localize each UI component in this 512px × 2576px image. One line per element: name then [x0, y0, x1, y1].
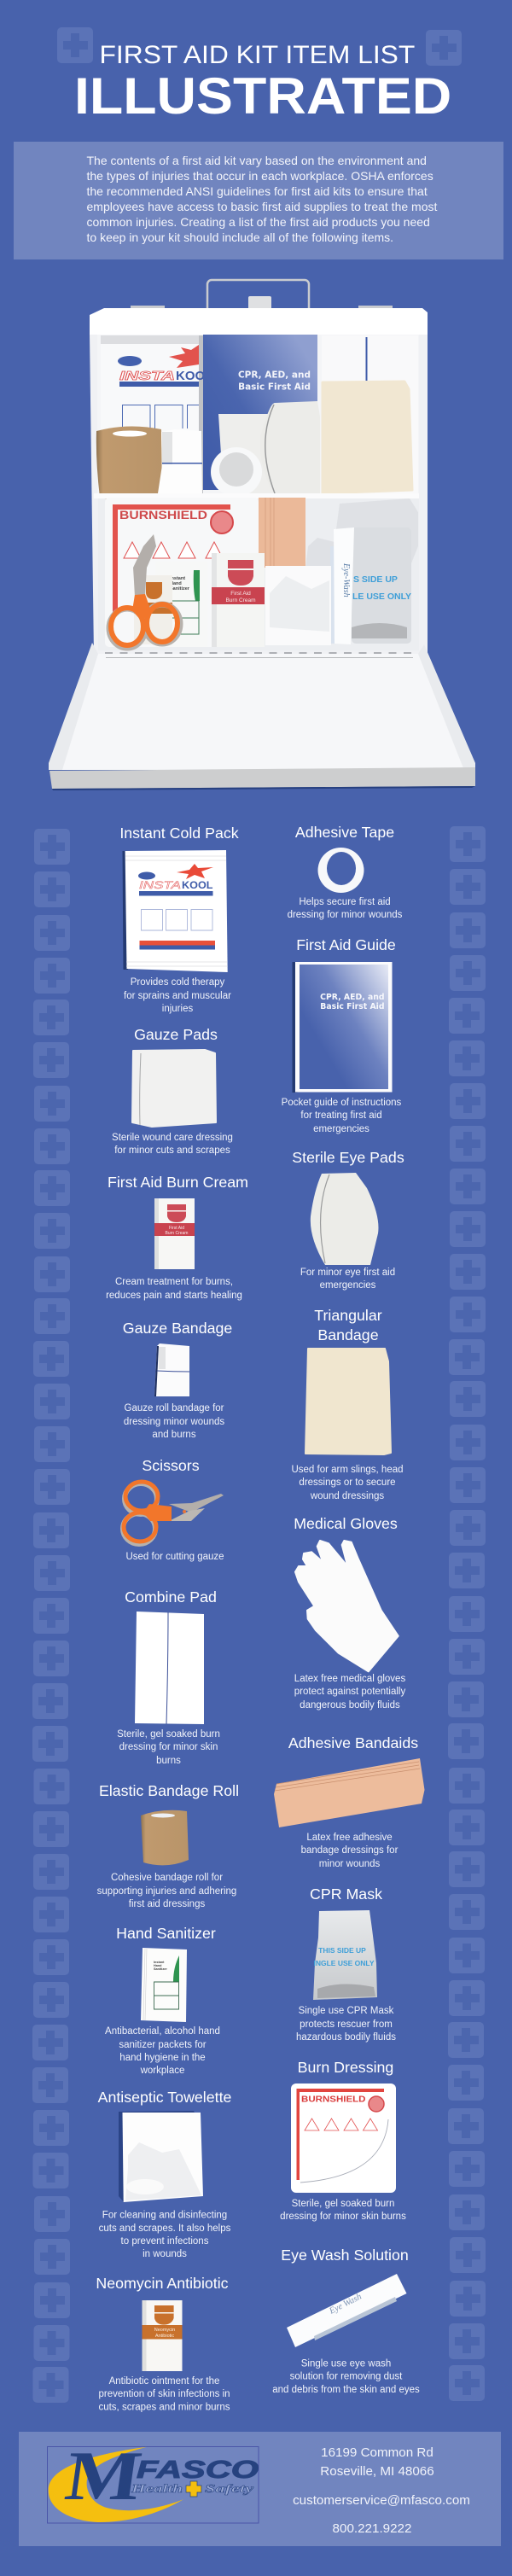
item: triangular bandage	[291, 1307, 404, 1501]
icon: triangular bandage	[305, 1349, 391, 1454]
cold pack in kit: KOO	[176, 369, 205, 383]
icon: burn cream box	[154, 1198, 195, 1269]
cold pack in kit: INSTA	[119, 370, 175, 383]
CPR mask in kit: LE USE ONLY	[352, 592, 411, 602]
panel: footer	[19, 2432, 501, 2546]
icon: guide booklet: Basic First Aid	[320, 1002, 384, 1011]
description: Used for arm slings, head	[291, 1465, 404, 1475]
door front lip	[49, 767, 475, 789]
description: injuries	[162, 1004, 193, 1014]
icon: gauze pads	[132, 1050, 216, 1127]
icon: cold pack	[123, 850, 228, 972]
logo: MFASCO Health + Safety: FASCO	[137, 2457, 259, 2484]
icon: burn dressing: BURNSHIELD	[301, 2095, 365, 2105]
item: scissors	[123, 1457, 224, 1562]
description: minor wounds	[319, 1859, 381, 1869]
item: medical gloves	[294, 1515, 405, 1711]
title: FIRST AID KIT ITEM LIST	[99, 41, 415, 69]
description: workplace	[140, 2066, 184, 2076]
description: Latex free medical gloves	[294, 1674, 405, 1684]
shelf	[94, 493, 419, 498]
antiseptic towelette in kit	[265, 566, 331, 645]
intro text: the types of injuries that occur in each workplace. OSHA enforces	[87, 169, 433, 183]
heading: Instant Cold Pack	[119, 825, 239, 842]
kit interior	[90, 335, 428, 656]
gauze bandage in kit	[158, 429, 202, 493]
item: burn dressing	[280, 2059, 406, 2222]
hand sanitizer in kit: Hand	[170, 581, 182, 586]
description: Single use CPR Mask	[299, 2006, 394, 2016]
item: adhesive bandaids	[274, 1734, 425, 1869]
eye wash in kit	[330, 527, 354, 644]
burn dressing in kit: BURNSHIELD	[119, 509, 207, 522]
description: hazardous bodily fluids	[296, 2032, 396, 2043]
heading: Adhesive Tape	[295, 824, 394, 841]
heading: Gauze Pads	[134, 1026, 218, 1043]
icon: eye wash: Eye Wash	[327, 2292, 364, 2317]
description: dangerous bodily fluids	[300, 1700, 400, 1711]
burn dressing in kit	[105, 498, 259, 647]
icon: CPR mask bag	[313, 1910, 377, 2000]
title	[74, 41, 451, 125]
heading: Combine Pad	[125, 1588, 217, 1606]
item: sterile eye pads	[292, 1149, 404, 1291]
icon: scissors	[123, 1482, 224, 1544]
description: for sprains and muscular	[124, 991, 231, 1001]
heading: Neomycin Antibiotic	[96, 2275, 229, 2292]
icon: elastic bandage roll	[141, 1810, 189, 1865]
description: Provides cold therapy	[131, 977, 225, 988]
icon: burn dressing	[291, 2084, 396, 2193]
kit handle	[131, 280, 393, 312]
icon: eye wash	[287, 2274, 406, 2347]
heading: Gauze Bandage	[123, 1320, 232, 1337]
CPR mask in kit: S SIDE UP	[353, 574, 398, 585]
description: bandage dressings for	[301, 1845, 399, 1856]
description: and debris from the skin and eyes	[272, 2385, 420, 2395]
description: prevention of skin infections in	[98, 2389, 230, 2399]
hand sanitizer in kit	[155, 562, 207, 647]
heading: Hand Sanitizer	[116, 1925, 216, 1942]
item: first aid guide	[282, 936, 402, 1134]
heading: Sterile Eye Pads	[292, 1149, 404, 1166]
logo: MFASCO Health + Safety: M	[61, 2438, 147, 2515]
description: Helps secure first aid	[299, 897, 391, 907]
icon: tape ring	[317, 848, 364, 893]
eye wash in kit: Eye-Wash	[341, 562, 351, 597]
description: Sterile, gel soaked burn	[117, 1729, 220, 1740]
item: antiseptic towelette	[98, 2089, 232, 2259]
item: CPR mask	[296, 1885, 396, 2043]
description: Antibacterial, alcohol hand	[105, 2026, 220, 2037]
icon: hand sanitizer packet	[141, 1948, 187, 2022]
heading: Bandage	[317, 1326, 379, 1343]
description: dressing minor wounds	[124, 1417, 224, 1427]
icon: antiseptic towelette	[119, 2111, 203, 2202]
description: protects rescuer from	[300, 2019, 393, 2030]
description: dressing for minor skin	[119, 1742, 218, 1752]
intro text: The contents of a first aid kit vary based on the environment and	[87, 154, 427, 167]
item: neomycin antibiotic	[96, 2275, 230, 2412]
description: in wounds	[143, 2249, 187, 2259]
description: Sterile, gel soaked burn	[292, 2199, 394, 2209]
description: dressing for minor wounds	[288, 910, 403, 920]
CPR mask in kit	[352, 527, 411, 644]
item: eye wash solution	[272, 2247, 420, 2395]
medical gloves in kit	[305, 498, 418, 568]
icon: cold pack: KOOL	[182, 879, 213, 891]
first aid guide in kit: CPR, AED, and	[238, 370, 311, 381]
description: Cream treatment for burns,	[115, 1277, 233, 1287]
item: elastic bandage roll	[97, 1782, 239, 1909]
item: gauze bandage	[123, 1320, 232, 1440]
neomycin in kit	[134, 575, 172, 644]
heading: First Aid Guide	[296, 936, 396, 953]
adhesive bandaids in kit	[259, 498, 305, 568]
kit lid band	[90, 308, 428, 335]
icon: neomycin box	[142, 2300, 183, 2371]
description: supporting injuries and adhering	[97, 1886, 236, 1897]
icon: CPR mask bag: THIS SIDE UP	[318, 1946, 366, 1955]
icon: burn cream box: First Aid	[169, 1226, 184, 1231]
cold pack in kit	[101, 335, 205, 494]
icon: hand sanitizer packet: Hand	[154, 1964, 162, 1967]
description: burns	[156, 1756, 181, 1766]
description: cuts and scrapes. It also helps	[99, 2223, 231, 2234]
intro text: employees have access to basic first aid supplies to treat the most	[87, 200, 437, 213]
description: For minor eye first aid	[300, 1268, 395, 1278]
icon: neomycin box: Antibiotic	[155, 2334, 174, 2339]
description: and burns	[152, 1430, 196, 1440]
heading: Medical Gloves	[294, 1515, 398, 1532]
icon: glove	[295, 1541, 399, 1671]
heading: Triangular	[314, 1307, 382, 1324]
icon: cold pack: INSTA	[139, 879, 181, 891]
sterile eye pads in kit	[218, 401, 320, 495]
description: Cohesive bandage roll for	[111, 1873, 223, 1883]
description: Sterile wound care dressing	[112, 1133, 233, 1143]
description: For cleaning and disinfecting	[102, 2211, 227, 2221]
description: sanitizer packets for	[119, 2040, 207, 2050]
hinge	[105, 653, 418, 658]
icon: guide booklet: CPR, AED, and	[320, 993, 384, 1002]
item: adhesive tape	[288, 824, 403, 920]
description: hand hygiene in the	[119, 2053, 206, 2063]
description: to prevent infections	[121, 2236, 209, 2247]
first aid guide in kit: Basic First Aid	[238, 382, 311, 393]
contact details: customerservice@mfasco.com	[293, 2493, 470, 2508]
heading: Burn Dressing	[298, 2059, 393, 2076]
hand sanitizer in kit: Instant	[170, 576, 185, 581]
hand sanitizer in kit: Sanitizer	[170, 586, 190, 592]
panel: introduction	[14, 142, 503, 259]
logo: MFASCO Health + Safety: Health	[130, 2483, 183, 2496]
intro text: the recommended ANSI guidelines for first aid kits to ensure that	[87, 184, 428, 198]
item: combine pad	[117, 1588, 220, 1766]
description: dressing for minor skin burns	[280, 2212, 406, 2222]
icon: bandaids	[274, 1758, 425, 1827]
kit door	[49, 643, 475, 790]
heading: Eye Wash Solution	[281, 2247, 409, 2264]
description: emergencies	[313, 1124, 369, 1134]
burn cream in kit: Burn Cream	[225, 597, 256, 603]
icon: neomycin box: Neomycin	[154, 2328, 175, 2333]
description: reduces pain and starts healing	[106, 1291, 242, 1301]
description: Latex free adhesive	[306, 1833, 393, 1843]
description: protect against potentially	[294, 1687, 405, 1697]
intro text: to keep in your kit should include all of the following items.	[87, 230, 393, 244]
description: wound dressings	[310, 1491, 384, 1501]
description: Single use eye wash	[301, 2359, 391, 2369]
logo: MFASCO Health + Safety: Safety	[205, 2483, 254, 2496]
heading: Elastic Bandage Roll	[99, 1782, 239, 1799]
icon: burn cream box: Burn Cream	[166, 1231, 188, 1236]
combine pad in kit	[322, 335, 418, 495]
icon: CPR mask bag: INGLE USE ONLY	[313, 1959, 375, 1967]
contact details: 800.221.9222	[333, 2521, 411, 2536]
scissors in kit	[109, 534, 180, 648]
description: cuts, scrapes and minor burns	[98, 2402, 230, 2412]
burn cream in kit	[212, 553, 265, 647]
description: first aid dressings	[129, 1899, 205, 1909]
elastic bandage in kit	[96, 426, 162, 500]
description: emergencies	[320, 1280, 376, 1291]
heading: Adhesive Bandaids	[288, 1734, 418, 1751]
description: dressings or to secure	[299, 1477, 396, 1488]
heading: First Aid Burn Cream	[108, 1174, 248, 1191]
item: gauze pads	[112, 1026, 233, 1156]
icon: eye pad	[311, 1173, 378, 1265]
description: for minor cuts and scrapes	[114, 1145, 230, 1156]
description: Pocket guide of instructions	[282, 1098, 402, 1108]
heading: Scissors	[142, 1457, 200, 1474]
description: Gauze roll bandage for	[125, 1403, 224, 1413]
contact details: 16199 Common Rd	[321, 2445, 433, 2460]
icon: hand sanitizer packet: Sanitizer	[154, 1967, 167, 1971]
intro text: common injuries. Creating a list of the first aid products you need	[87, 215, 430, 229]
description: Used for cutting gauze	[125, 1552, 224, 1562]
icon: hand sanitizer packet: Instant	[154, 1961, 165, 1964]
logo: MFASCO Health + Safety	[48, 2438, 259, 2523]
contact details: Roseville, MI 48066	[320, 2464, 434, 2479]
item: instant cold pack	[119, 825, 239, 1014]
description: Antibiotic ointment for the	[109, 2376, 219, 2387]
heading: Antiseptic Towelette	[98, 2089, 232, 2106]
heading: CPR Mask	[310, 1885, 382, 1903]
burn cream in kit: First Aid	[230, 591, 251, 597]
icon: gauze bandage	[154, 1343, 189, 1396]
first aid guide in kit	[203, 335, 317, 490]
description: solution for removing dust	[290, 2372, 403, 2382]
adhesive tape in kit	[211, 447, 262, 497]
icon: combine pad	[135, 1611, 204, 1724]
icon: guide booklet	[292, 962, 393, 1093]
item: hand sanitizer	[105, 1925, 220, 2076]
item: first aid burn cream	[106, 1174, 248, 1301]
title: ILLUSTRATED	[74, 67, 451, 125]
triangular bandage in kit	[323, 382, 412, 493]
illustration: open first aid kit	[49, 280, 475, 790]
description: for treating first aid	[300, 1110, 382, 1121]
